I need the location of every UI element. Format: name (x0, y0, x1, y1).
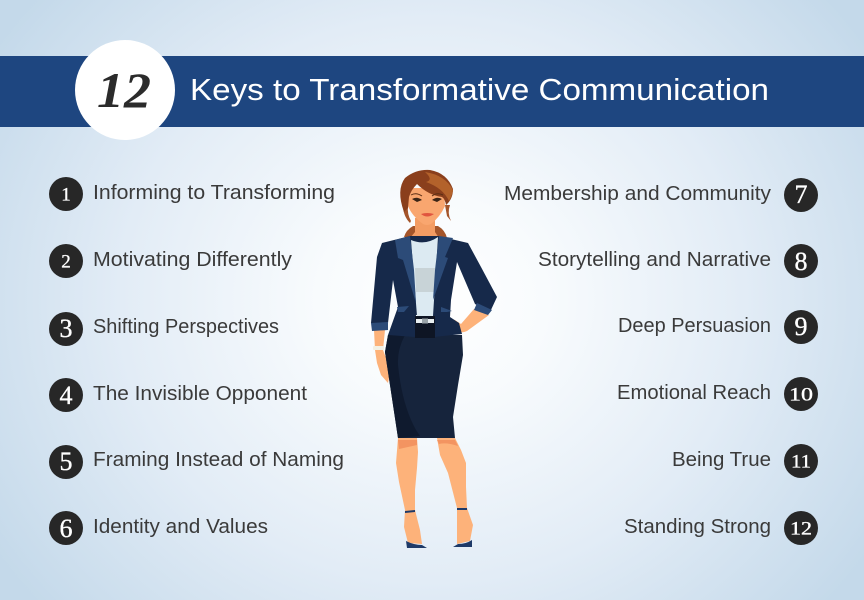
item 10: Emotional Reach (617, 381, 771, 404)
item 9: 9 (794, 312, 808, 341)
item 12: 12 (790, 518, 812, 540)
item 3 (49, 312, 279, 346)
item 7: 7 (794, 180, 808, 209)
hair back (404, 226, 447, 240)
item 11 (672, 444, 818, 478)
jacket lapels (395, 236, 416, 303)
jacket cuffs (371, 322, 388, 331)
side curls (403, 205, 451, 223)
item 10: 10 (789, 384, 813, 406)
item 8 (538, 244, 818, 278)
item 4: The Invisible Opponent (93, 382, 307, 405)
item 8: 8 (794, 247, 808, 276)
item 5: Framing Instead of Naming (93, 448, 344, 471)
item 1 (49, 177, 335, 211)
item 5 (49, 445, 344, 479)
item 10 (617, 377, 818, 411)
skirt (385, 335, 463, 438)
left list (49, 177, 344, 545)
item 8: Storytelling and Narrative (538, 248, 771, 271)
item 12 (624, 511, 818, 545)
item 11: Being True (672, 448, 771, 471)
mouth (421, 213, 434, 216)
title: Keys to Transformative Communication (190, 72, 769, 107)
item 9 (618, 310, 818, 344)
legs (396, 438, 473, 544)
item 2: 2 (61, 252, 71, 272)
shirt (411, 237, 438, 316)
banner strip (0, 56, 864, 127)
hair top (400, 170, 453, 212)
belt (415, 316, 435, 338)
eyebrows (411, 194, 443, 196)
header banner (0, 40, 864, 140)
head (400, 170, 453, 225)
left arm and hand (374, 330, 390, 383)
jacket (371, 236, 497, 337)
item 1: 1 (61, 184, 71, 206)
eyes (412, 198, 442, 202)
item 3: Shifting Perspectives (93, 315, 279, 338)
neck and chest (410, 218, 439, 250)
item 12: Standing Strong (624, 515, 771, 538)
item 3: 3 (60, 314, 72, 343)
figure: businesswoman (371, 170, 497, 548)
face (408, 188, 445, 225)
jacket pockets (397, 306, 452, 312)
item 2 (49, 244, 293, 278)
shoes (405, 508, 472, 548)
right list (504, 178, 818, 545)
item 6: 6 (60, 514, 72, 543)
badge: 12: 12 (97, 62, 151, 118)
item 4: 4 (60, 381, 72, 410)
right forearm and hand (442, 309, 489, 332)
item 7 (504, 178, 818, 212)
item 4 (49, 378, 307, 412)
item 1: Informing to Transforming (93, 181, 335, 204)
item 11: 11 (791, 452, 811, 472)
item 2: Motivating Differently (93, 248, 293, 271)
item 5: 5 (60, 447, 72, 476)
item 9: Deep Persuasion (618, 314, 771, 337)
watch (373, 346, 384, 350)
badge: 12 (75, 40, 175, 140)
item 6: Identity and Values (93, 515, 268, 538)
item 7: Membership and Community (504, 182, 772, 205)
item 6 (49, 511, 268, 545)
